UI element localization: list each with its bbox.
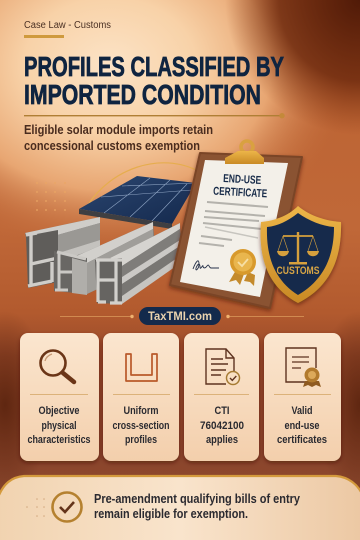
- scales icon: [277, 232, 319, 264]
- dots: [26, 498, 45, 517]
- certificate heading: [213, 173, 268, 200]
- subtitle: Eligible solar module imports retain: [24, 122, 213, 137]
- label: Uniform: [124, 405, 158, 417]
- label: 76042100: [200, 420, 244, 432]
- label: characteristics: [28, 434, 90, 446]
- bottom callout band: [0, 476, 360, 540]
- solar panel: [79, 176, 196, 229]
- label: certificates: [277, 434, 327, 446]
- customs shield: [261, 206, 341, 303]
- gold seal: [229, 249, 256, 286]
- subtitle: [24, 122, 213, 153]
- icon: certificate with rosette: [286, 348, 321, 387]
- card: objective physical characteristics: [20, 333, 99, 461]
- label: end-use: [284, 420, 320, 432]
- profile 3: [95, 223, 182, 304]
- label: Objective: [38, 405, 80, 417]
- title: [24, 51, 284, 110]
- subtitle: concessional customs exemption: [24, 138, 200, 153]
- callout text: Pre-amendment qualifying bills of entry: [94, 491, 301, 506]
- label: [112, 405, 170, 446]
- callout text: [94, 491, 301, 521]
- clip: [225, 141, 264, 164]
- label: physical: [42, 420, 76, 432]
- label: CTI: [214, 405, 230, 417]
- label: Valid: [292, 405, 313, 417]
- aluminium profiles: [25, 217, 182, 304]
- shield label: CUSTOMS: [276, 265, 320, 277]
- profile 2: [54, 222, 156, 295]
- card: CTI 76042100 applies: [184, 333, 259, 461]
- icon: check circle: [52, 492, 82, 522]
- eyebrow: case law label: Case Law - Customs: [24, 20, 111, 31]
- certificate heading: END-USE: [223, 173, 262, 187]
- certificate lines: [199, 202, 268, 246]
- label: [277, 405, 327, 446]
- profile 1: [25, 217, 100, 288]
- signature: [193, 261, 219, 270]
- label: applies: [206, 434, 238, 446]
- icon: magnifying glass: [40, 350, 74, 382]
- title: IMPORTED CONDITION: [24, 79, 261, 110]
- website pill: [60, 307, 304, 325]
- label: cross-section: [112, 420, 170, 432]
- board: [170, 153, 302, 308]
- paper: [180, 160, 288, 297]
- clipboard with end-use certificate: [170, 141, 302, 308]
- certificate heading: CERTIFICATE: [213, 186, 268, 200]
- title rule: [24, 113, 285, 118]
- label: [28, 405, 90, 446]
- website pill: TaxTMI.com: [148, 311, 212, 323]
- card: valid end-use certificates: [264, 333, 341, 461]
- icon: U channel: [126, 354, 157, 381]
- eyebrow: case law label: [24, 20, 111, 38]
- label: profiles: [125, 434, 157, 446]
- decorative arc and dots: [36, 163, 200, 211]
- card: uniform cross-section profiles: [103, 333, 179, 461]
- label: [200, 405, 244, 446]
- icon: document with check: [206, 349, 240, 384]
- callout text: remain eligible for exemption.: [94, 506, 248, 521]
